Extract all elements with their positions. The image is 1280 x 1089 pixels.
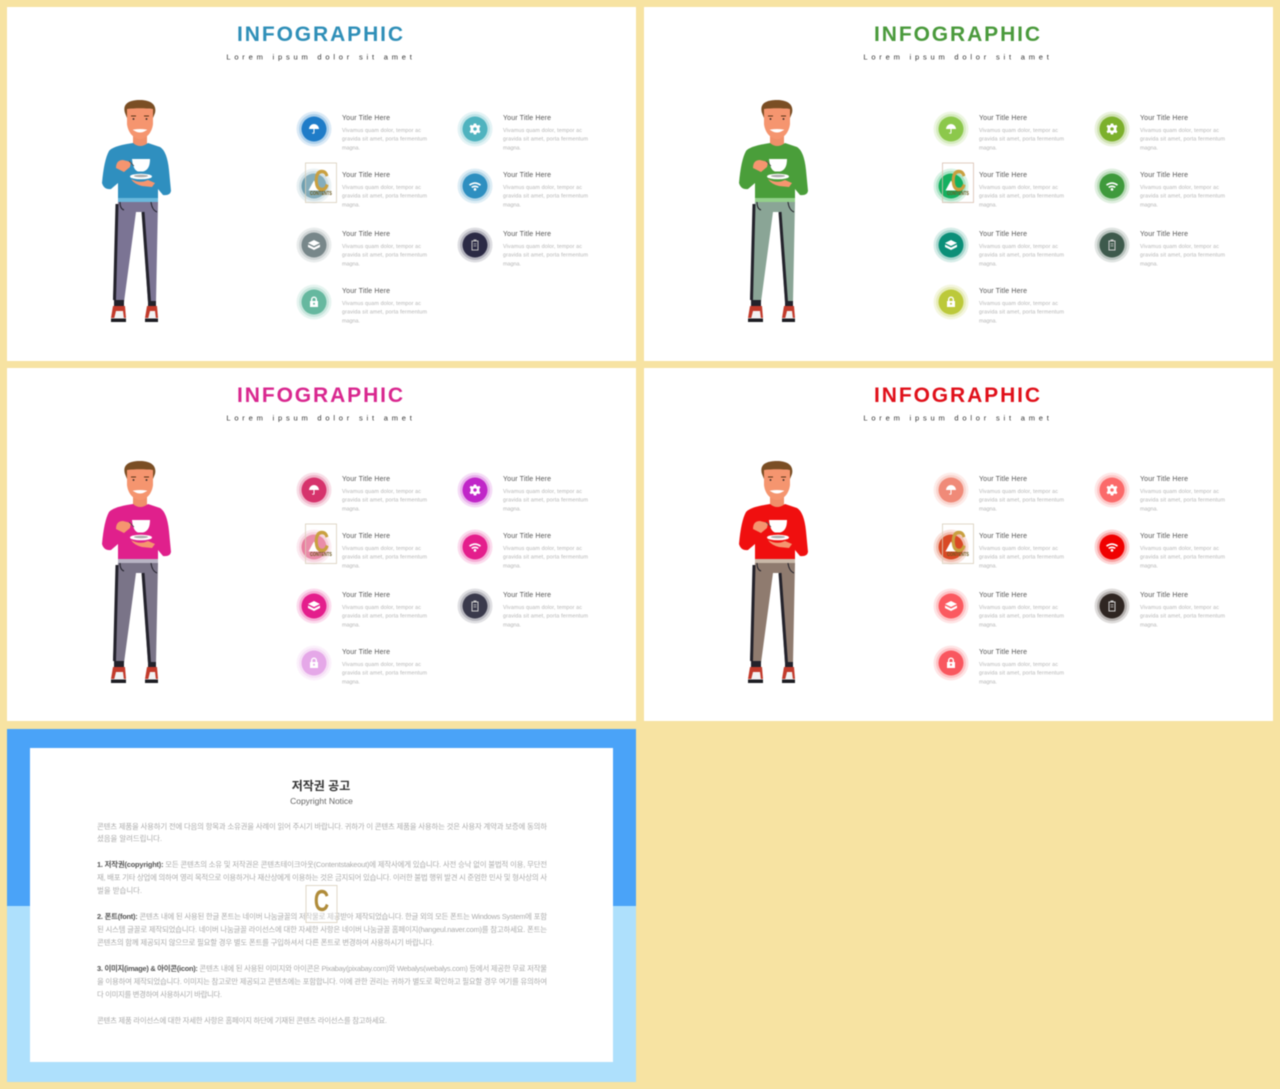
item: clipboard: Your Title Here [1140,592,1188,599]
item: flame: magna. [342,202,360,208]
notice section 3 [97,964,547,999]
item: wifi [458,168,588,208]
notice section 2 [97,912,547,947]
item: clipboard: Your Title Here [1140,231,1188,238]
item: umbrella: Your Title Here [342,476,390,483]
item: gear: gravida sit amet, porta fermentum [1140,498,1226,504]
item: lock [934,284,1064,324]
notice intro [97,822,547,843]
item: umbrella: Your Title Here [979,476,1027,483]
item: layers [296,228,428,267]
item: clipboard: Vivamus quam dolor, tempor ac [503,605,582,611]
title: INFOGRAPHIC [874,23,1042,46]
item: gear: magna. [503,506,521,512]
item: flame: magna. [979,202,997,208]
watermark logo: CONTENTS [947,191,969,196]
watermark logo [306,883,337,922]
item: clipboard: gravida sit amet, porta fermentum [503,253,588,259]
item: clipboard: gravida sit amet, porta fermentum [1140,614,1226,620]
item: umbrella: gravida sit amet, porta fermentum [342,137,428,143]
item: gear: Your Title Here [503,115,551,122]
item: flame: Your Title Here [342,172,390,179]
item: gear: Vivamus quam dolor, tempor ac [1140,489,1219,495]
notice closing line: 콘텐츠 제품 라이선스에 대한 자세한 사항은 홈페이지 하단에 기재된 콘텐츠 라이선스를 참고하세요. [97,1016,387,1025]
notice section 3: 을 이용하여 제작되었습니다. 이미지는 참고로만 제공되고 콘텐츠에는 포함합니다. 이에 관한 권리는 귀하가 별도로 확인하고 필요할 경우 여기를 유의하여 [97,977,547,986]
item: umbrella: gravida sit amet, porta fermentum [979,137,1064,143]
notice section 2: 2. 폰트(font): 콘텐츠 내에 된 사용된 한글 폰트는 네이버 나눔글꼴의 저작물로 제공받아 제작되었습니다. 한글 외의 모든 폰트는 Windows System에 포함 [97,912,547,921]
item: lock: Your Title Here [342,649,390,656]
notice section 1 [97,860,547,895]
notice section 1: 재, 배포 기타 상업에 의하여 영리 목적으로 이용하거나 재산상에게 이용하는 것은 금지되어 있습니다. 이러한 불법 행위 발견 시 준엄한 민사 및 형사상의 사 [97,873,547,882]
item: layers [296,588,428,628]
item: umbrella: magna. [342,506,360,512]
item: lock: magna. [342,318,360,324]
item: wifi: gravida sit amet, porta fermentum [1140,194,1226,200]
item: gear [458,472,588,512]
item: layers: Vivamus quam dolor, tempor ac [979,605,1058,611]
item: wifi [1094,530,1226,569]
watermark logo: CONTENTS [310,191,332,196]
item: clipboard: magna. [503,622,521,628]
item: lock: Vivamus quam dolor, tempor ac [979,662,1058,668]
item: wifi: Your Title Here [503,172,551,179]
item: gear: gravida sit amet, porta fermentum [503,137,588,143]
item: flame: gravida sit amet, porta fermentum [342,555,428,561]
item: wifi: Vivamus quam dolor, tempor ac [1140,185,1219,191]
item: wifi: magna. [503,563,521,569]
title: INFOGRAPHIC [237,384,405,407]
item: flame: Vivamus quam dolor, tempor ac [342,546,421,552]
watermark logo: C [314,883,329,918]
item: umbrella: Vivamus quam dolor, tempor ac [979,489,1058,495]
item: umbrella: Your Title Here [979,115,1027,122]
item: flame: Your Title Here [979,533,1027,540]
watermark logo: CONTENTS [947,552,969,557]
item: clipboard: magna. [1140,622,1158,628]
title: INFOGRAPHIC [874,384,1042,407]
panel: copyright notice [7,729,636,1082]
item: wifi: Your Title Here [503,533,551,540]
item: flame: gravida sit amet, porta fermentum [342,194,428,200]
item: layers: Your Title Here [342,231,390,238]
item: layers: gravida sit amet, porta fermentum [979,253,1064,259]
item: clipboard: Your Title Here [503,231,551,238]
notice subheading: Copyright Notice [290,796,353,806]
item: gear: gravida sit amet, porta fermentum [503,498,588,504]
illustration: man with coffee cup [102,100,171,322]
item: lock: Vivamus quam dolor, tempor ac [979,301,1058,307]
watermark logo [306,163,336,202]
item: lock: gravida sit amet, porta fermentum [979,310,1064,316]
panel: red infographic [644,368,1273,721]
item: clipboard: Your Title Here [503,592,551,599]
item: umbrella: Vivamus quam dolor, tempor ac [342,489,421,495]
item: clipboard: magna. [503,261,521,267]
item: wifi: Your Title Here [1140,533,1188,540]
notice section 2: 된 시스템 글꼴로 제작되었습니다. 네이버 나눔글꼴 라이선스에 대한 자세한 사항은 네이버 나눔글꼴 홈페이지(hangeul.naver.com)를 참고하세요. 폰트는 [97,925,547,934]
item: umbrella [296,112,428,151]
item: flame: Your Title Here [342,533,390,540]
item: flame [934,530,1064,569]
item: gear [1094,112,1226,151]
item: lock: magna. [979,679,997,685]
item: flame: Vivamus quam dolor, tempor ac [342,185,421,191]
item: wifi [1094,168,1226,208]
item: layers: Your Title Here [979,231,1027,238]
item: layers: gravida sit amet, porta fermentum [342,253,428,259]
item: layers: Your Title Here [342,592,390,599]
item: clipboard: gravida sit amet, porta fermentum [503,614,588,620]
item: wifi: gravida sit amet, porta fermentum [503,555,588,561]
item: gear: Vivamus quam dolor, tempor ac [503,489,582,495]
item: layers: gravida sit amet, porta fermentum [342,614,428,620]
illustration: man with coffee cup [739,461,808,683]
watermark logo: C [314,524,329,559]
item: umbrella [934,112,1064,151]
item: wifi: magna. [1140,563,1158,569]
item: gear [1094,472,1226,512]
item: clipboard: magna. [1140,261,1158,267]
item: clipboard [1094,228,1226,267]
item: flame: magna. [342,563,360,569]
notice intro: 셨음을 알려드립니다. [97,834,162,843]
watermark logo: CONTENTS [310,552,332,557]
subtitle: Lorem ipsum dolor sit amet [226,414,416,422]
item: flame: gravida sit amet, porta fermentum [979,555,1064,561]
notice section 3: 다 이미지를 변경하여 사용하시기 바랍니다. [97,990,222,999]
item: gear: Vivamus quam dolor, tempor ac [503,128,582,134]
item: layers [934,588,1064,628]
item: wifi: magna. [503,202,521,208]
item: wifi: Vivamus quam dolor, tempor ac [503,546,582,552]
item: clipboard [458,588,588,628]
item: layers: Vivamus quam dolor, tempor ac [979,244,1058,250]
item: layers: magna. [342,261,360,267]
item: lock: gravida sit amet, porta fermentum [342,671,428,677]
subtitle: Lorem ipsum dolor sit amet [226,52,416,62]
item: lock: magna. [342,679,360,685]
item: lock [296,646,428,685]
item: lock: Your Title Here [979,649,1027,656]
notice section 3: 3. 이미지(image) & 아이콘(icon): 콘텐츠 내에 된 사용된 이미지와 아이콘은 Pixabay(pixabay.com)와 Webalys(webalys.com) 등에서 제공한 무료 저작물 [97,964,547,973]
item: gear: magna. [1140,145,1158,151]
item: wifi: Vivamus quam dolor, tempor ac [503,185,582,191]
item: lock [934,646,1064,685]
item: gear: Vivamus quam dolor, tempor ac [1140,128,1219,134]
watermark logo [306,524,336,564]
item: clipboard: Vivamus quam dolor, tempor ac [1140,605,1219,611]
item: lock: Your Title Here [979,288,1027,295]
title: INFOGRAPHIC [237,23,405,46]
item: wifi: gravida sit amet, porta fermentum [503,194,588,200]
item: umbrella: Vivamus quam dolor, tempor ac [342,128,421,134]
item: flame [296,530,428,569]
item: gear: Your Title Here [503,476,551,483]
panel: blue infographic [7,7,636,361]
item: layers [934,228,1064,267]
notice section 2: 콘텐츠의 함께 제공되지 않으므로 필요할 경우 별도 폰트를 구입하셔서 다른 폰트로 변경하여 사용하시기 바랍니다. [97,938,434,947]
item: flame: Vivamus quam dolor, tempor ac [979,546,1058,552]
item: clipboard [1094,588,1226,628]
item: gear: magna. [1140,506,1158,512]
item: gear: Your Title Here [1140,115,1188,122]
subtitle: Lorem ipsum dolor sit amet [863,52,1053,62]
item: wifi: gravida sit amet, porta fermentum [1140,555,1226,561]
item: layers: Vivamus quam dolor, tempor ac [342,605,421,611]
item: layers: gravida sit amet, porta fermentum [979,614,1064,620]
item: wifi: Vivamus quam dolor, tempor ac [1140,546,1219,552]
item: umbrella [296,472,428,512]
item: layers: Your Title Here [979,592,1027,599]
watermark logo [942,524,974,564]
notice section 1: 1. 저작권(copyright): 모든 콘텐츠의 소유 및 저작권은 콘텐츠테이크아웃(Contentstakeout)에 제작사에게 있습니다. 사전 승낙 없이 불법적 이용, 무단전 [97,860,547,869]
item: umbrella: magna. [342,145,360,151]
item: layers: magna. [979,622,997,628]
illustration: man with coffee cup [739,100,808,322]
watermark logo: C [314,163,329,198]
item: wifi [458,530,588,569]
item: lock: gravida sit amet, porta fermentum [979,671,1064,677]
item: flame: Your Title Here [979,172,1027,179]
item: flame: magna. [979,563,997,569]
item: umbrella: Your Title Here [342,115,390,122]
item: flame [296,168,428,208]
item: umbrella: magna. [979,506,997,512]
item: lock [296,284,428,324]
item: layers: magna. [342,622,360,628]
watermark logo [942,163,974,202]
item: gear: magna. [503,145,521,151]
subtitle: Lorem ipsum dolor sit amet [863,414,1053,422]
notice heading: 저작권 공고 [292,778,350,793]
item: wifi: Your Title Here [1140,172,1188,179]
item: lock: gravida sit amet, porta fermentum [342,310,428,316]
illustration: man with coffee cup [102,461,171,683]
item: umbrella: magna. [979,145,997,151]
item: clipboard: Vivamus quam dolor, tempor ac [503,244,582,250]
item: layers: magna. [979,261,997,267]
item: gear: gravida sit amet, porta fermentum [1140,137,1226,143]
item: lock: Vivamus quam dolor, tempor ac [342,662,421,668]
notice section 1: 벌을 받습니다. [97,886,142,895]
item: umbrella: Vivamus quam dolor, tempor ac [979,128,1058,134]
item: clipboard: gravida sit amet, porta fermentum [1140,253,1226,259]
item: clipboard [458,228,588,267]
item: layers: Vivamus quam dolor, tempor ac [342,244,421,250]
panel: pink infographic [7,368,636,721]
item: umbrella: gravida sit amet, porta fermentum [979,498,1064,504]
item: clipboard: Vivamus quam dolor, tempor ac [1140,244,1219,250]
item: wifi: magna. [1140,202,1158,208]
item: lock: Vivamus quam dolor, tempor ac [342,301,421,307]
panel: green infographic [644,7,1273,361]
item: gear: Your Title Here [1140,476,1188,483]
item: flame: gravida sit amet, porta fermentum [979,194,1064,200]
item: flame: Vivamus quam dolor, tempor ac [979,185,1058,191]
item: lock: magna. [979,318,997,324]
item: gear [458,112,588,151]
notice intro: 콘텐츠 제품을 사용하기 전에 다음의 항목과 소유권을 사례이 읽어 주시기 바랍니다. 귀하가 이 콘텐츠 제품을 사용하는 것은 사용자 계약과 보증에 동의하 [97,822,547,831]
watermark logo: C [951,163,966,198]
item: umbrella: gravida sit amet, porta fermentum [342,498,428,504]
item: umbrella [934,472,1064,512]
watermark logo: C [951,524,966,559]
item: lock: Your Title Here [342,288,390,295]
item: flame [934,168,1064,208]
